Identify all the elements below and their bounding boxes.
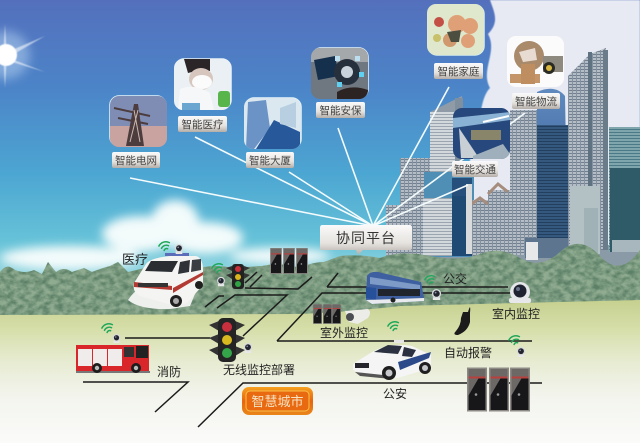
label: 智能物流	[515, 95, 557, 108]
buildings: skyline	[386, 48, 640, 285]
icon: camera light large	[244, 343, 252, 353]
panel: 智能电网	[110, 96, 167, 168]
icon: camera ambulance	[175, 244, 183, 254]
sun glow	[0, 24, 45, 88]
label: 公交: 公交	[443, 271, 467, 286]
icon: wifi right	[509, 336, 519, 344]
bus	[366, 272, 424, 304]
button: 智慧城市	[242, 387, 313, 415]
white mid buildings	[466, 184, 510, 258]
building base	[386, 245, 640, 285]
servers outdoor	[313, 304, 341, 324]
icon: security tablet	[311, 48, 368, 99]
panel: 智能家庭	[427, 4, 484, 79]
far low buildings	[386, 96, 463, 258]
icon: camera right	[517, 347, 525, 357]
network lines	[130, 87, 525, 226]
label: 消防: 消防	[157, 364, 181, 379]
label: 无线监控部署: 无线监控部署	[223, 362, 295, 377]
icon: camera light	[217, 277, 225, 286]
police car	[353, 340, 431, 380]
central tower	[510, 89, 575, 260]
icon: power tower	[110, 96, 167, 147]
servers top	[270, 248, 308, 274]
background: sky	[0, 0, 640, 290]
label: 室外监控: 室外监控	[320, 325, 368, 340]
icon: logistics	[507, 36, 564, 87]
icon: bullet camera	[345, 309, 370, 324]
label: 智能大厦	[249, 154, 291, 167]
background: pale right sky	[470, 0, 640, 290]
icon: wifi bus	[425, 276, 435, 284]
icon: transport hub	[453, 108, 510, 159]
button: 智慧城市: 智慧城市	[251, 394, 304, 409]
icon: lab researcher	[174, 59, 230, 110]
icon: wifi light	[212, 264, 222, 272]
label: 室内监控: 室内监控	[492, 306, 540, 321]
icon: dome camera	[509, 282, 531, 303]
panel: 智能安保	[311, 48, 368, 118]
label: 医疗: 医疗	[122, 252, 148, 267]
large traffic light	[209, 318, 245, 362]
icon: camera bus	[432, 289, 441, 300]
fire truck	[76, 345, 150, 373]
icon: wifi ambulance	[159, 242, 169, 250]
cloud	[0, 200, 330, 270]
panel: 智能大厦	[244, 98, 301, 168]
icon: glass building	[244, 98, 301, 149]
icon: camera fire truck	[113, 334, 120, 343]
label: 公安: 公安	[383, 386, 407, 401]
tall right tower	[568, 48, 608, 254]
far right towers	[609, 127, 640, 252]
small traffic light	[226, 264, 250, 289]
icon: telephone handset	[454, 307, 470, 335]
label: 智能家庭	[438, 65, 480, 78]
label: 智能医疗	[182, 118, 224, 131]
background: forest band	[0, 244, 640, 320]
icon: clay family	[427, 4, 484, 55]
icon: wifi fire truck	[102, 324, 112, 332]
panel: 智能物流	[507, 36, 564, 109]
icon: wifi police	[388, 322, 398, 330]
roads	[83, 272, 542, 427]
label: 自动报警: 自动报警	[444, 345, 492, 360]
label: 智能电网	[115, 154, 157, 167]
ambulance	[128, 253, 203, 309]
label: 智能安保	[320, 104, 362, 117]
label: 智能交通	[454, 163, 496, 176]
panel: 协同平台	[320, 225, 412, 255]
servers bottom	[467, 368, 530, 412]
background: ground	[0, 300, 640, 443]
panel: 智能交通	[452, 108, 510, 177]
panel: 智能医疗	[174, 59, 231, 132]
teal block	[423, 172, 474, 257]
panel: 协同平台: 协同平台	[336, 230, 396, 246]
